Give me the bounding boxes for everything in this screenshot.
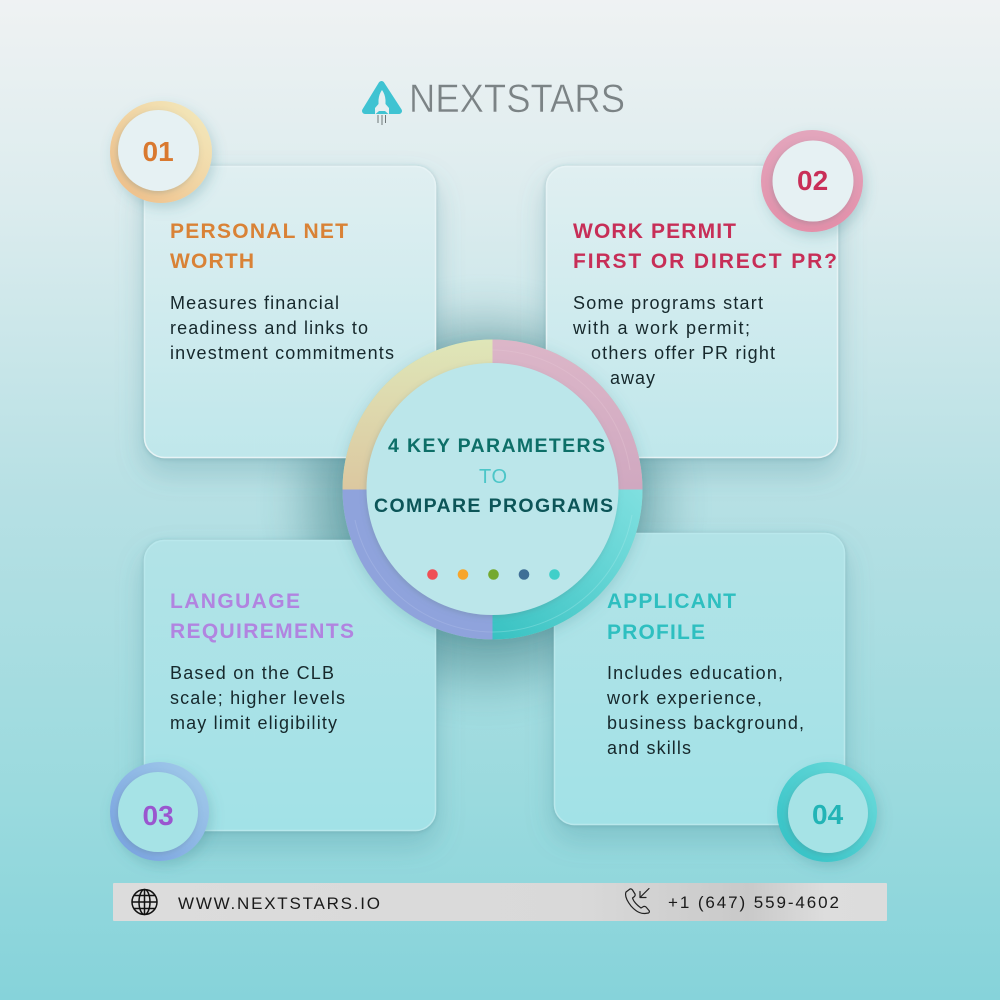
icon: rocket triangle bbox=[365, 84, 399, 125]
badge 02 bbox=[761, 130, 863, 232]
central ring bbox=[342, 340, 642, 640]
logo bbox=[365, 77, 625, 125]
panel: personal net worth: readiness and links to bbox=[170, 318, 368, 338]
panel: personal net worth: WORTH bbox=[170, 250, 254, 273]
panel: language requirements: scale; higher levels bbox=[170, 688, 345, 708]
panel: language requirements: REQUIREMENTS bbox=[170, 620, 354, 643]
panel: language requirements bbox=[144, 540, 436, 830]
badge 04: 04 bbox=[812, 799, 844, 830]
center title: 4 KEY PARAMETERS bbox=[388, 435, 605, 457]
panel: applicant profile bbox=[554, 534, 844, 824]
panel: personal net worth bbox=[144, 166, 436, 458]
heading: APPLICANT bbox=[607, 590, 736, 613]
badge 01 bbox=[110, 101, 212, 203]
panel: applicant profile: Includes education, bbox=[607, 663, 783, 683]
panel: applicant profile: business background, bbox=[607, 713, 804, 733]
panel: personal net worth: Measures financial bbox=[170, 293, 339, 313]
heading: PERSONAL NET bbox=[170, 220, 348, 243]
panel: work permit: with a work permit; bbox=[572, 318, 750, 338]
wordmark: NEXTSTARS bbox=[409, 77, 625, 121]
panel: applicant profile: PROFILE bbox=[607, 621, 705, 644]
badge 04 bbox=[777, 762, 877, 862]
icon: phone bbox=[626, 888, 649, 914]
panel: language requirements: may limit eligibility bbox=[170, 713, 337, 733]
panel: work permit: FIRST OR DIRECT PR? bbox=[573, 250, 837, 273]
central ring: COMPARE PROGRAMS bbox=[374, 495, 613, 517]
badge 03: 03 bbox=[142, 800, 174, 831]
inner disc bbox=[366, 363, 618, 615]
panel: language requirements: Based on the CLB bbox=[170, 663, 334, 683]
central ring: TO bbox=[479, 466, 507, 488]
badge 01: 01 bbox=[142, 136, 174, 167]
panel: work permit: Some programs start bbox=[573, 293, 763, 313]
panel: work permit: away bbox=[610, 368, 655, 388]
badge 02: 02 bbox=[797, 165, 828, 196]
heading: LANGUAGE bbox=[170, 590, 300, 613]
phone number: +1 (647) 559-4602 bbox=[668, 893, 839, 912]
panel: work permit: others offer PR right bbox=[591, 343, 775, 363]
panel: work permit bbox=[546, 166, 838, 458]
panel: applicant profile: and skills bbox=[607, 738, 691, 758]
footer bar bbox=[113, 883, 887, 921]
badge 03 bbox=[110, 762, 209, 861]
heading: WORK PERMIT bbox=[573, 220, 736, 243]
panel: personal net worth: investment commitments bbox=[170, 343, 394, 363]
icon: globe bbox=[132, 890, 157, 914]
dots bbox=[427, 569, 560, 580]
website: WWW.NEXTSTARS.IO bbox=[178, 894, 380, 913]
panel: applicant profile: work experience, bbox=[606, 688, 762, 708]
